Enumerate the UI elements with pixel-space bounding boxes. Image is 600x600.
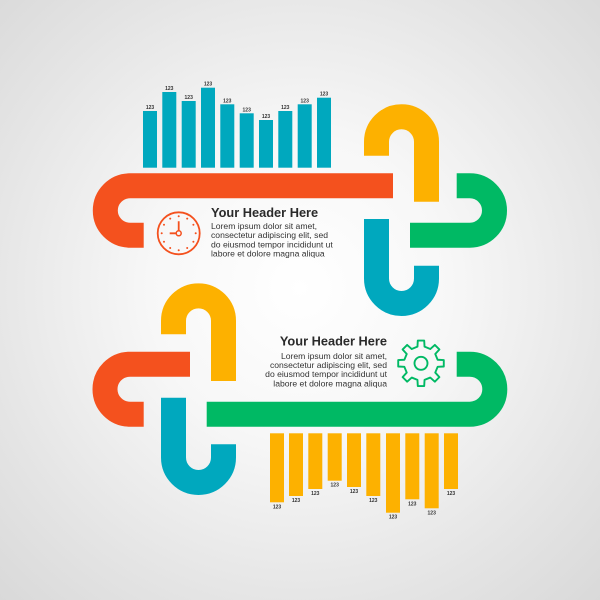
text block 1: labore et dolore magna aliqua [211,249,325,259]
top bar chart: 123 [320,92,328,98]
bottom bar chart: 123 [311,491,320,497]
text block 1: Your Header Here [211,205,318,220]
bottom bar chart: 123 [331,483,339,489]
top bar chart: 123 [262,114,270,120]
bottom pipe: yellow [174,296,224,381]
text block 2: labore et dolore magna aliqua [273,378,387,388]
text block 2: consectetur adipiscing elit, sed [270,360,387,370]
text block 1: consectetur adipiscing elit, sed [211,230,328,240]
bottom bar chart [270,433,458,521]
top pipe: green [410,186,494,235]
top bar chart: 123 [204,82,212,88]
icon: clock [158,212,200,254]
bottom bar chart: 123 [408,501,417,507]
top pipe: teal [376,219,426,304]
bottom bar chart: 123 [447,491,455,497]
top bar chart: 123 [281,105,290,111]
bottom bar chart: 123 [350,489,358,495]
top bar chart [143,82,331,168]
text block 1: do eiusmod tempor incididunt ut [211,239,333,249]
top bar chart: 123 [165,86,174,92]
top bar chart: 123 [185,95,193,101]
bottom bar chart: 123 [369,498,378,504]
bottom bar chart: 123 [273,504,281,510]
top pipe: orange [105,186,393,235]
bottom pipe: green [207,364,495,414]
top bar chart: 123 [223,98,232,104]
bottom pipe: orange [105,364,190,414]
top bar chart: 123 [301,98,309,104]
bottom pipe: teal [174,398,224,482]
top bar chart: 123 [243,107,251,113]
text block 2: Your Header Here [280,334,387,349]
text block 1 [211,205,333,259]
text block 1: Lorem ipsum dolor sit amet, [211,221,317,231]
text block 2 [265,334,388,388]
text block 2: do eiusmod tempor incididunt ut [265,369,388,379]
bottom bar chart: 123 [428,510,436,516]
bottom bar chart: 123 [389,515,397,521]
text block 2: Lorem ipsum dolor sit amet, [281,351,387,361]
bottom bar chart: 123 [292,498,300,504]
top bar chart: 123 [146,105,154,111]
icon: gear [398,341,444,386]
top pipe: yellow [376,117,426,202]
